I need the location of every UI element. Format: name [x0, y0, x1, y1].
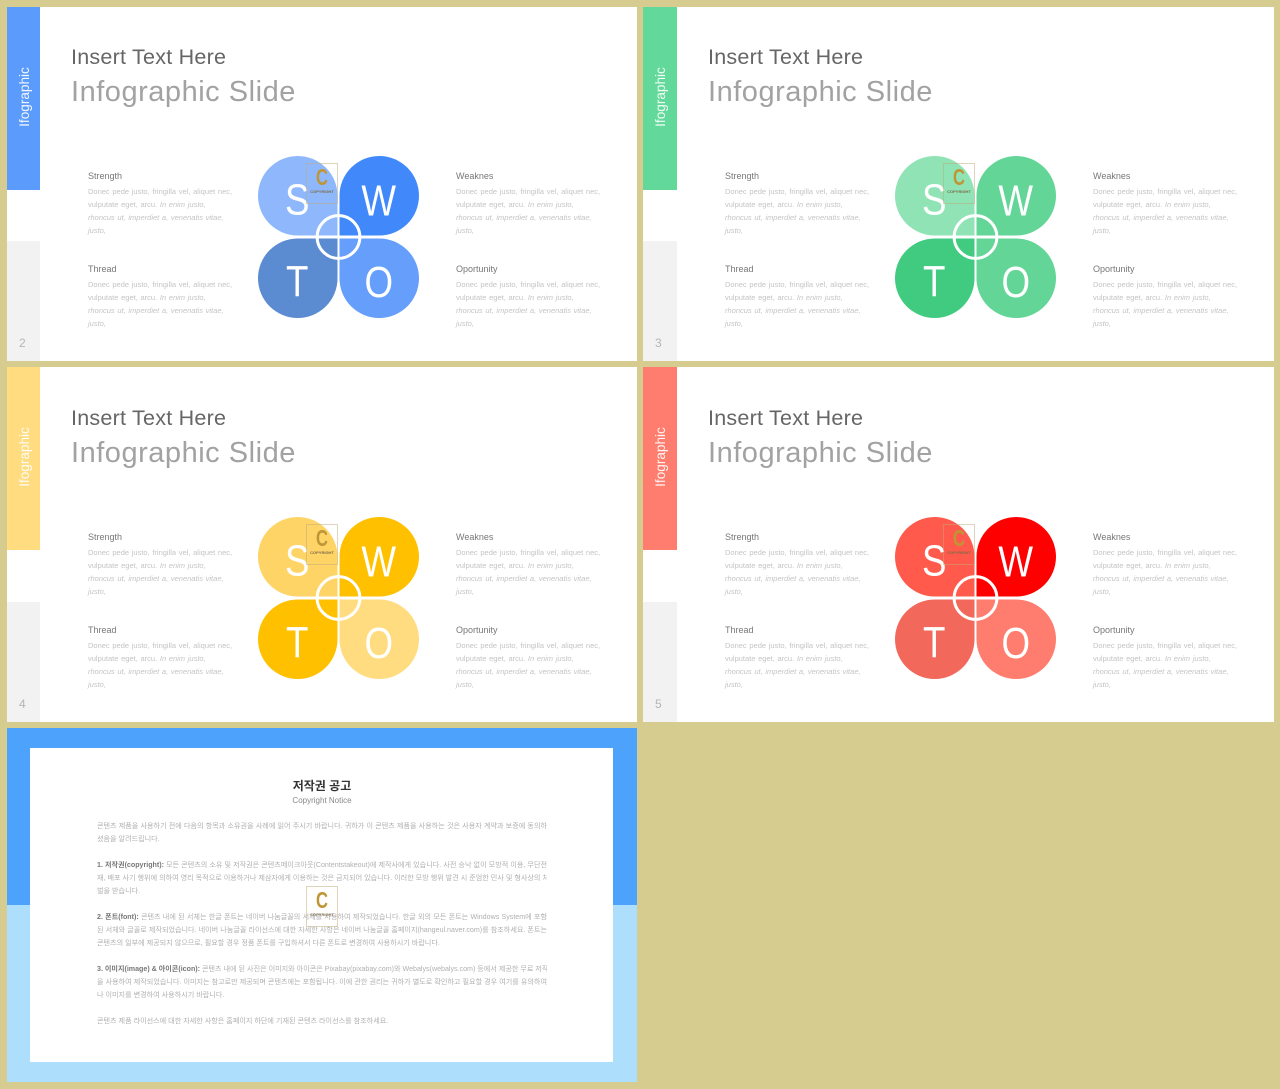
copyright body text: 3. 이미지(image) & 아이콘(icon): 콘텐츠 내에 된 사진은 이미지와 아이콘은 Pixabay(pixabay.com)와 Webalys(webalys.com) 등에서 제공한 무료 저작물 — [97, 965, 547, 973]
text block: Oportunity: vulputate eget, arcu. In enim justo, — [456, 293, 574, 302]
copyright body text: 2. 폰트(font): 콘텐츠 내에 된 서체는 한글 폰트는 네이버 나눔글꼴의 서체를 사용하여 제작되었습니다. 한글 외의 모든 폰트는 Windows System에 포함 — [97, 913, 547, 921]
text block: Oportunity: Donec pede justo, fringilla vel, aliquet nec, — [456, 280, 600, 289]
subtitle: Infographic Slide — [71, 76, 296, 108]
chart: SWOT clover: W — [998, 537, 1033, 586]
copyright body text: 콘텐츠 제품을 사용하기 전에 다음의 항목과 소유권을 사례에 읽어 주시기 바랍니다. 귀하가 이 콘텐츠 제품을 사용하는 것은 사용자 계약과 보증에 동의하 — [97, 822, 547, 830]
heading: Oportunity: Oportunity — [1093, 625, 1135, 635]
heading: Strength: Strength — [88, 171, 122, 181]
chart: SWOT clover: S — [285, 536, 310, 585]
text block: Strength — [87, 187, 232, 235]
text block: Oportunity — [1092, 280, 1237, 328]
text block: Thread: rhoncus ut, imperdiet a, venenatis vitae, — [725, 667, 861, 676]
text block: Oportunity — [455, 280, 600, 328]
text block: Weaknes — [1092, 548, 1237, 596]
copyright body text: 콘텐츠 제품 라이선스에 대한 자세한 사항은 홈페이지 하단에 기재된 콘텐츠 라이선스를 참조하세요. — [97, 1017, 388, 1025]
watermark: COPYRIGHT — [947, 550, 971, 555]
text block: Weaknes: vulputate eget, arcu. In enim justo, — [1093, 200, 1211, 209]
chart: SWOT clover: T — [286, 617, 308, 667]
chart: SWOT clover: T — [286, 256, 308, 306]
watermark — [943, 163, 975, 204]
page number block: 5 — [655, 697, 662, 711]
copyright body text: 나 이미지를 변경하여 사용하시기 바랍니다. — [97, 991, 224, 999]
text block: Oportunity: rhoncus ut, imperdiet a, venenatis vitae, — [456, 306, 592, 315]
heading: Weaknes: Weaknes — [456, 171, 493, 181]
watermark: C — [316, 164, 328, 190]
text block: Weaknes: rhoncus ut, imperdiet a, venenatis vitae, — [1093, 213, 1229, 222]
text block: Thread: justo, — [725, 680, 743, 689]
chart: SWOT clover — [895, 156, 1056, 318]
panel: red SWOT slide — [644, 368, 1274, 722]
text block: Strength — [724, 548, 869, 596]
title: Insert Text Here — [71, 406, 226, 430]
text block: Thread: rhoncus ut, imperdiet a, venenatis vitae, — [725, 306, 861, 315]
page number block — [643, 241, 677, 361]
watermark: C — [316, 887, 328, 913]
text block: Thread — [87, 641, 232, 689]
copyright body text: 된 서체와 글꼴로 제작되었습니다. 네이버 나눔글꼴 라이선스에 대한 자세한 사항은 네이버 나눔글꼴 홈페이지(hangeul.naver.com)를 참조하세요. 폰트는 — [97, 926, 547, 934]
chart: SWOT clover: O — [364, 257, 393, 307]
watermark: COPYRIGHT — [310, 912, 334, 917]
heading: Oportunity: Oportunity — [456, 625, 498, 635]
copyright body text — [97, 822, 547, 1025]
text block: Strength: justo, — [88, 587, 106, 596]
sidebar: yellow label — [7, 367, 40, 550]
text block: Oportunity — [1092, 641, 1237, 689]
text block: Strength: rhoncus ut, imperdiet a, venenatis vitae, — [88, 574, 224, 583]
heading: Thread: Thread — [725, 625, 754, 635]
chart: SWOT clover: T — [923, 617, 945, 667]
chart: SWOT clover — [258, 156, 419, 318]
sidebar: green label: Ifographic — [653, 67, 668, 127]
text block: Thread: Donec pede justo, fringilla vel, aliquet nec, — [725, 641, 869, 650]
subtitle: Infographic Slide — [71, 437, 296, 469]
text block: Thread: vulputate eget, arcu. In enim justo, — [725, 293, 843, 302]
copyright body text: 을 사용하여 제작되었습니다. 이미지는 참고로만 제공되며 콘텐츠에는 포함됩니다. 이에 관한 권리는 귀하가 별도로 확인하고 필요할 경우 여기를 유의하여 — [97, 978, 547, 986]
text block: Weaknes: rhoncus ut, imperdiet a, venenatis vitae, — [456, 574, 592, 583]
text block: Thread: justo, — [88, 680, 106, 689]
watermark: C — [953, 164, 965, 190]
text block: Strength: justo, — [725, 587, 743, 596]
panel: copyright notice slide — [7, 728, 637, 1082]
chart: SWOT clover: S — [922, 175, 947, 224]
chart: SWOT clover: S — [922, 536, 947, 585]
title: Insert Text Here — [708, 45, 863, 69]
text block: Weaknes: justo, — [456, 226, 474, 235]
page number block: 4 — [19, 697, 26, 711]
text block: Weaknes: justo, — [1093, 226, 1111, 235]
text block: Oportunity: justo, — [456, 319, 474, 328]
text block: Weaknes — [455, 187, 600, 235]
copyright subheading: Copyright Notice — [292, 796, 352, 805]
heading: Weaknes: Weaknes — [1093, 171, 1130, 181]
text block: Weaknes: Donec pede justo, fringilla vel, aliquet nec, — [1093, 548, 1237, 557]
copyright body text: 재, 배포 사기 행위에 의하여 영리 목적으로 이용하거나 제삼자에게 이용하는 것은 금지되어 있습니다. 이러한 모방 행위 발견 시 준엄한 민사 및 형사상의 처 — [97, 874, 547, 882]
text block: Oportunity: vulputate eget, arcu. In enim justo, — [456, 654, 574, 663]
text block: Strength: Donec pede justo, fringilla vel, aliquet nec, — [725, 187, 869, 196]
text block: Weaknes: rhoncus ut, imperdiet a, venenatis vitae, — [1093, 574, 1229, 583]
watermark — [306, 524, 338, 565]
text block: Strength: vulputate eget, arcu. In enim justo, — [88, 561, 206, 570]
text block: Thread: justo, — [725, 319, 743, 328]
watermark: COPYRIGHT — [310, 550, 334, 555]
panel: yellow SWOT slide — [7, 368, 637, 722]
chart: SWOT clover: T — [923, 256, 945, 306]
chart: SWOT clover: S — [285, 175, 310, 224]
text block: Oportunity: justo, — [456, 680, 474, 689]
text block: Weaknes: vulputate eget, arcu. In enim justo, — [456, 200, 574, 209]
subtitle: Infographic Slide — [708, 437, 933, 469]
chart: SWOT clover — [895, 517, 1056, 679]
heading: Weaknes: Weaknes — [456, 532, 493, 542]
page number block — [7, 241, 40, 361]
text block: Thread — [724, 641, 869, 689]
text block: Strength: vulputate eget, arcu. In enim justo, — [725, 561, 843, 570]
text block: Thread — [724, 280, 869, 328]
chart: SWOT clover: W — [998, 176, 1033, 225]
page number block: 3 — [655, 336, 662, 350]
text block: Oportunity: vulputate eget, arcu. In enim justo, — [1093, 293, 1211, 302]
text block: Strength: vulputate eget, arcu. In enim justo, — [725, 200, 843, 209]
text block: Thread: justo, — [88, 319, 106, 328]
text block: Strength: Donec pede justo, fringilla vel, aliquet nec, — [725, 548, 869, 557]
heading: Thread: Thread — [725, 264, 754, 274]
text block: Weaknes: justo, — [1093, 587, 1111, 596]
heading: Strength: Strength — [725, 532, 759, 542]
text block: Strength: rhoncus ut, imperdiet a, venenatis vitae, — [725, 574, 861, 583]
heading: Strength: Strength — [88, 532, 122, 542]
heading: Thread: Thread — [88, 264, 117, 274]
text block: Strength: Donec pede justo, fringilla vel, aliquet nec, — [88, 548, 232, 557]
page number block — [7, 602, 40, 722]
title: Insert Text Here — [71, 45, 226, 69]
text block: Weaknes: vulputate eget, arcu. In enim justo, — [1093, 561, 1211, 570]
copyright body text: 벌을 받습니다. — [97, 887, 140, 895]
subtitle: Infographic Slide — [708, 76, 933, 108]
watermark — [943, 524, 975, 565]
text block: Strength: rhoncus ut, imperdiet a, venenatis vitae, — [88, 213, 224, 222]
text block: Weaknes — [1092, 187, 1237, 235]
text block: Oportunity: vulputate eget, arcu. In enim justo, — [1093, 654, 1211, 663]
text block: Oportunity — [455, 641, 600, 689]
text block: Thread: vulputate eget, arcu. In enim justo, — [725, 654, 843, 663]
heading: Oportunity: Oportunity — [1093, 264, 1135, 274]
text block: Thread: Donec pede justo, fringilla vel, aliquet nec, — [725, 280, 869, 289]
text block: Oportunity: rhoncus ut, imperdiet a, venenatis vitae, — [1093, 306, 1229, 315]
heading: Strength: Strength — [725, 171, 759, 181]
text block: Strength — [87, 548, 232, 596]
copyright card — [30, 748, 613, 1062]
panel: green SWOT slide — [644, 7, 1274, 361]
text block: Oportunity: rhoncus ut, imperdiet a, venenatis vitae, — [456, 667, 592, 676]
sidebar: red label: Ifographic — [653, 427, 668, 487]
text block: Weaknes: justo, — [456, 587, 474, 596]
page number block: 2 — [19, 336, 26, 350]
text block: Thread: rhoncus ut, imperdiet a, venenatis vitae, — [88, 306, 224, 315]
text block: Strength: Donec pede justo, fringilla vel, aliquet nec, — [88, 187, 232, 196]
text block: Strength: vulputate eget, arcu. In enim justo, — [88, 200, 206, 209]
heading: Oportunity: Oportunity — [456, 264, 498, 274]
panel: blue SWOT slide — [7, 7, 637, 361]
chart: SWOT clover: O — [1001, 257, 1030, 307]
watermark: C — [953, 525, 965, 551]
text block: Strength: justo, — [725, 226, 743, 235]
sidebar: red label — [643, 367, 677, 550]
chart: SWOT clover: O — [364, 618, 393, 668]
text block: Strength — [724, 187, 869, 235]
chart: SWOT clover — [258, 517, 419, 679]
text block: Oportunity: Donec pede justo, fringilla vel, aliquet nec, — [456, 641, 600, 650]
page number block — [643, 602, 677, 722]
text block: Weaknes: Donec pede justo, fringilla vel, aliquet nec, — [1093, 187, 1237, 196]
text block: Oportunity: justo, — [1093, 680, 1111, 689]
sidebar: blue label: Ifographic — [17, 67, 32, 127]
heading: Weaknes: Weaknes — [1093, 532, 1130, 542]
copyright body text: 셨음을 알려드립니다. — [97, 835, 160, 843]
chart: SWOT clover: W — [361, 176, 396, 225]
text block: Weaknes — [455, 548, 600, 596]
text block: Thread: Donec pede justo, fringilla vel, aliquet nec, — [88, 280, 232, 289]
watermark: C — [316, 525, 328, 551]
text block: Thread: rhoncus ut, imperdiet a, venenatis vitae, — [88, 667, 224, 676]
text block: Thread: vulputate eget, arcu. In enim justo, — [88, 654, 206, 663]
text block: Oportunity: Donec pede justo, fringilla vel, aliquet nec, — [1093, 641, 1237, 650]
text block: Weaknes: Donec pede justo, fringilla vel, aliquet nec, — [456, 548, 600, 557]
text block: Weaknes: rhoncus ut, imperdiet a, venenatis vitae, — [456, 213, 592, 222]
watermark: COPYRIGHT — [947, 189, 971, 194]
text block: Strength: justo, — [88, 226, 106, 235]
watermark — [306, 886, 338, 927]
sidebar: blue label — [7, 7, 40, 190]
copyright body text: 1. 저작권(copyright): 모든 콘텐츠의 소유 및 저작권은 콘텐츠메이크아웃(Contentstakeout)에 제작사에게 있습니다. 사전 승낙 없이 모방적 이용, 무단전 — [97, 861, 547, 869]
title: Insert Text Here — [708, 406, 863, 430]
text block: Thread — [87, 280, 232, 328]
text block: Thread: Donec pede justo, fringilla vel, aliquet nec, — [88, 641, 232, 650]
text block: Oportunity: Donec pede justo, fringilla vel, aliquet nec, — [1093, 280, 1237, 289]
chart: SWOT clover: W — [361, 537, 396, 586]
watermark: COPYRIGHT — [310, 189, 334, 194]
watermark — [306, 163, 338, 204]
copyright heading: 저작권 공고 — [293, 779, 351, 793]
text block: Strength: rhoncus ut, imperdiet a, venenatis vitae, — [725, 213, 861, 222]
text block: Weaknes: Donec pede justo, fringilla vel, aliquet nec, — [456, 187, 600, 196]
chart: SWOT clover: O — [1001, 618, 1030, 668]
sidebar: yellow label: Ifographic — [17, 427, 32, 487]
text block: Weaknes: vulputate eget, arcu. In enim justo, — [456, 561, 574, 570]
sidebar: green label — [643, 7, 677, 190]
text block: Oportunity: justo, — [1093, 319, 1111, 328]
heading: Thread: Thread — [88, 625, 117, 635]
text block: Oportunity: rhoncus ut, imperdiet a, venenatis vitae, — [1093, 667, 1229, 676]
copyright body text: 콘텐츠의 일부에 제공되지 않으므로, 필요할 경우 정품 폰트를 구입하셔서 다른 폰트로 변경하여 사용하시기 바랍니다. — [97, 939, 440, 947]
text block: Thread: vulputate eget, arcu. In enim justo, — [88, 293, 206, 302]
